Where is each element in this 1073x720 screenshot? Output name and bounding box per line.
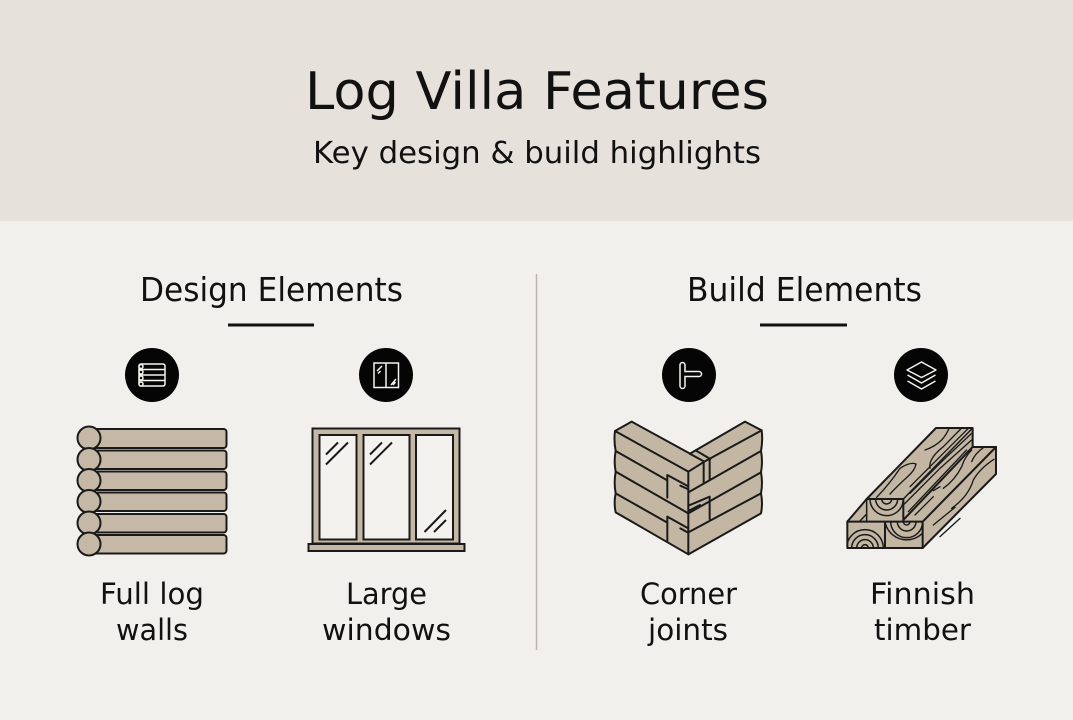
heading: build elements: Build Elements bbox=[687, 271, 922, 309]
label: corner joints bbox=[640, 577, 737, 647]
icon: log stack bbox=[125, 348, 179, 402]
icon: layers bbox=[894, 348, 948, 402]
label: finnish timber bbox=[870, 577, 975, 647]
heading: design elements bbox=[140, 271, 403, 326]
label: large windows: Large bbox=[346, 577, 427, 611]
label: full log walls: walls bbox=[116, 613, 188, 647]
label: finnish timber: Finnish bbox=[870, 577, 975, 611]
label: full log walls bbox=[100, 577, 204, 647]
label: finnish timber: timber bbox=[874, 613, 971, 647]
label: full log walls: Full log bbox=[100, 577, 204, 611]
subtitle: Key design & build highlights bbox=[313, 136, 761, 171]
wood grain bbox=[877, 428, 994, 537]
wood end rings bbox=[848, 500, 922, 547]
label: corner joints: joints bbox=[647, 613, 728, 647]
icon: window bbox=[359, 348, 413, 402]
heading: build elements bbox=[687, 271, 922, 326]
label: large windows bbox=[322, 577, 451, 647]
heading: design elements: Design Elements bbox=[140, 271, 403, 309]
label: large windows: windows bbox=[322, 613, 451, 647]
illustration: large windows bbox=[308, 428, 464, 551]
header band bbox=[0, 0, 1073, 221]
illustration: corner joints bbox=[614, 422, 762, 554]
illustration: finnish timber bbox=[847, 428, 996, 548]
title: Log Villa Features bbox=[305, 62, 769, 122]
illustration: full log walls bbox=[78, 426, 226, 556]
label: corner joints: Corner bbox=[640, 577, 737, 611]
icon: joint bbox=[662, 348, 716, 402]
